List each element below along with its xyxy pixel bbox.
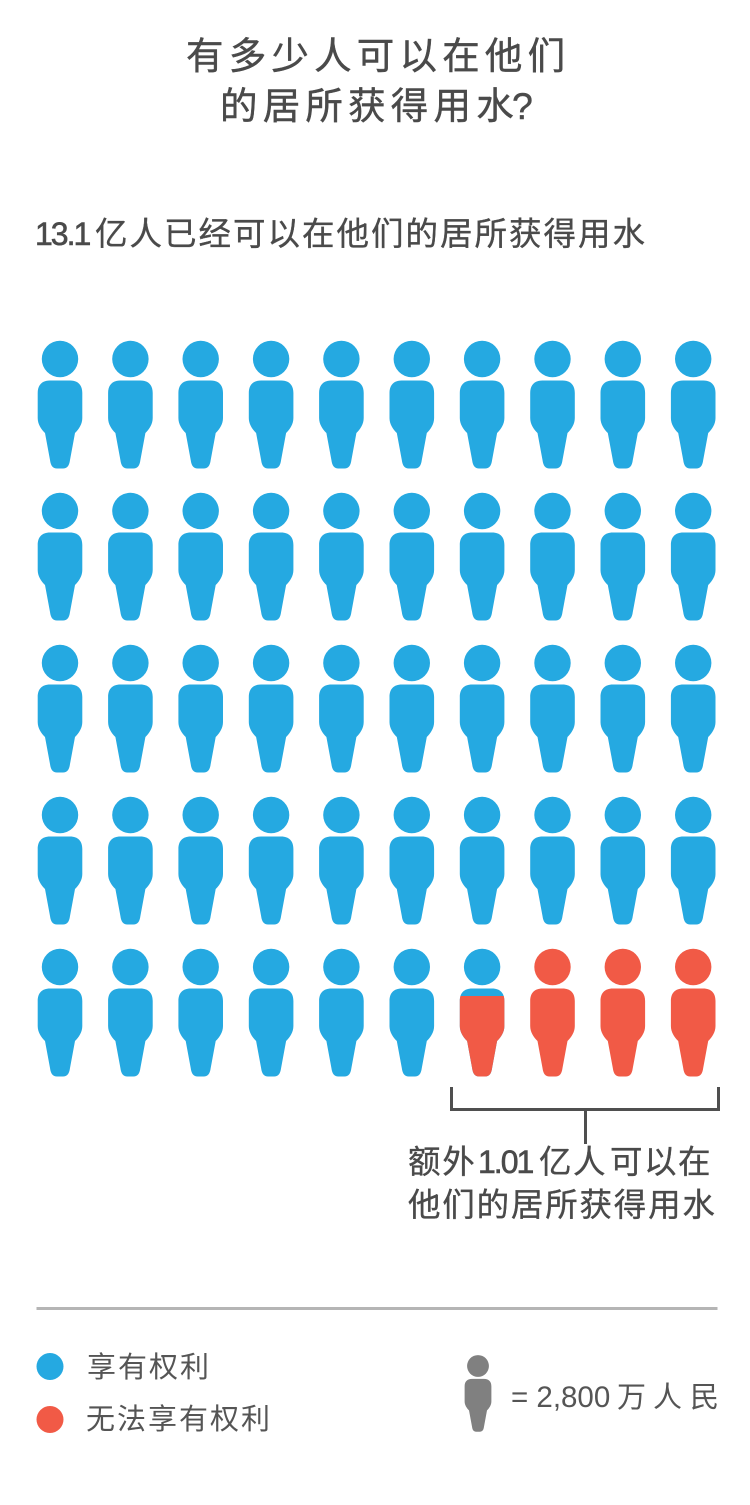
title: ? <box>512 85 538 127</box>
row 3 of people <box>38 645 715 772</box>
row 2 of people <box>38 493 715 620</box>
subheading: 1.31 billion have access: 13.1 <box>35 216 90 252</box>
legend: has access <box>36 1351 211 1384</box>
callout: additional 101 million: 以 <box>644 1144 678 1180</box>
legend: unit icon <box>465 1355 491 1432</box>
row 5 of people: blue, partial, red <box>38 949 715 1076</box>
callout: additional 101 million: 他们的居所获得用水 <box>408 1187 717 1223</box>
callout: additional 101 million: 可 <box>610 1144 644 1180</box>
legend: no access: 无法享有权利 <box>86 1403 272 1436</box>
subheading: 1.31 billion have access: 亿人已经可以在他们的居所获得用水 <box>95 216 647 252</box>
legend: unit value: = 2,800 <box>511 1381 610 1414</box>
callout: additional 101 million: 额外 <box>408 1144 477 1180</box>
callout: additional 101 million: 亿 <box>539 1144 573 1180</box>
legend divider <box>36 1307 718 1310</box>
bracket <box>452 1087 718 1144</box>
callout: additional 101 million <box>408 1144 717 1223</box>
pictogram grid: 50 people <box>38 341 715 1076</box>
row 4 of people <box>38 797 715 924</box>
title: 的居所获得用水 <box>220 85 519 127</box>
legend: unit value: 万 <box>617 1382 648 1414</box>
callout: additional 101 million: 人 <box>573 1144 607 1180</box>
callout: additional 101 million: 1.01 <box>478 1144 533 1180</box>
title: 有多少人可以在他们 <box>186 35 570 77</box>
legend: unit value: 民 <box>690 1382 721 1414</box>
title <box>186 35 570 127</box>
row 1 of people <box>38 341 715 468</box>
legend: has access: 享有权利 <box>87 1351 211 1384</box>
callout: additional 101 million: 在 <box>678 1144 712 1180</box>
legend: unit value: 人 <box>653 1382 684 1414</box>
